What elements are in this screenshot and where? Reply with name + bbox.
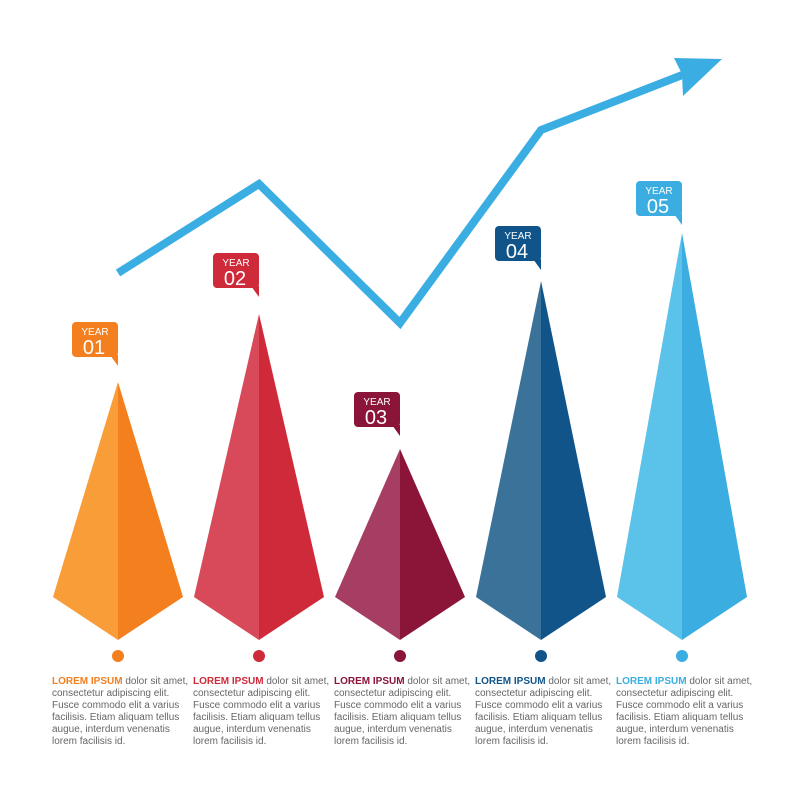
- label: year 05: 05: [647, 196, 669, 218]
- label: year 04: 04: [506, 241, 528, 263]
- pyramid 5: [617, 233, 747, 640]
- text block 2: LOREM IPSUM dolor sit amet, consectetur adipiscing elit. Fusce commodo elit a varius facilisis. Etiam aliquam tellus augue, interdum venenatis lorem facilisis id.: [193, 676, 329, 747]
- arrow: growth trend: [118, 58, 722, 323]
- label: year 02: YEAR: [222, 258, 250, 269]
- label: year 04: YEAR: [504, 231, 532, 242]
- label: year 02: 02: [224, 268, 246, 290]
- label: year 05: YEAR: [645, 186, 673, 197]
- label: year 03: 03: [365, 407, 387, 429]
- pyramid 2: [194, 314, 324, 640]
- dots: [112, 650, 688, 662]
- label: year 01: [72, 322, 118, 366]
- label: year 05: [636, 181, 682, 225]
- text block 4: LOREM IPSUM dolor sit amet, consectetur adipiscing elit. Fusce commodo elit a varius facilisis. Etiam aliquam tellus augue, interdum venenatis lorem facilisis id.: [475, 676, 611, 747]
- label: year 04: [495, 226, 541, 270]
- label: year 01: 01: [83, 337, 105, 359]
- text block 1: LOREM IPSUM dolor sit amet, consectetur adipiscing elit. Fusce commodo elit a varius facilisis. Etiam aliquam tellus augue, interdum venenatis lorem facilisis id.: [52, 676, 188, 747]
- pyramid 1: [53, 382, 183, 640]
- label: year 02: [213, 253, 259, 297]
- text block 5: LOREM IPSUM dolor sit amet, consectetur adipiscing elit. Fusce commodo elit a varius facilisis. Etiam aliquam tellus augue, interdum venenatis lorem facilisis id.: [616, 676, 752, 747]
- pyramid 3: [335, 449, 465, 640]
- pyramid 4: [476, 281, 606, 640]
- label: year 03: YEAR: [363, 397, 391, 408]
- label: year 03: [354, 392, 400, 436]
- label: year 01: YEAR: [81, 327, 109, 338]
- text block 3: LOREM IPSUM dolor sit amet, consectetur adipiscing elit. Fusce commodo elit a varius facilisis. Etiam aliquam tellus augue, interdum venenatis lorem facilisis id.: [334, 676, 470, 747]
